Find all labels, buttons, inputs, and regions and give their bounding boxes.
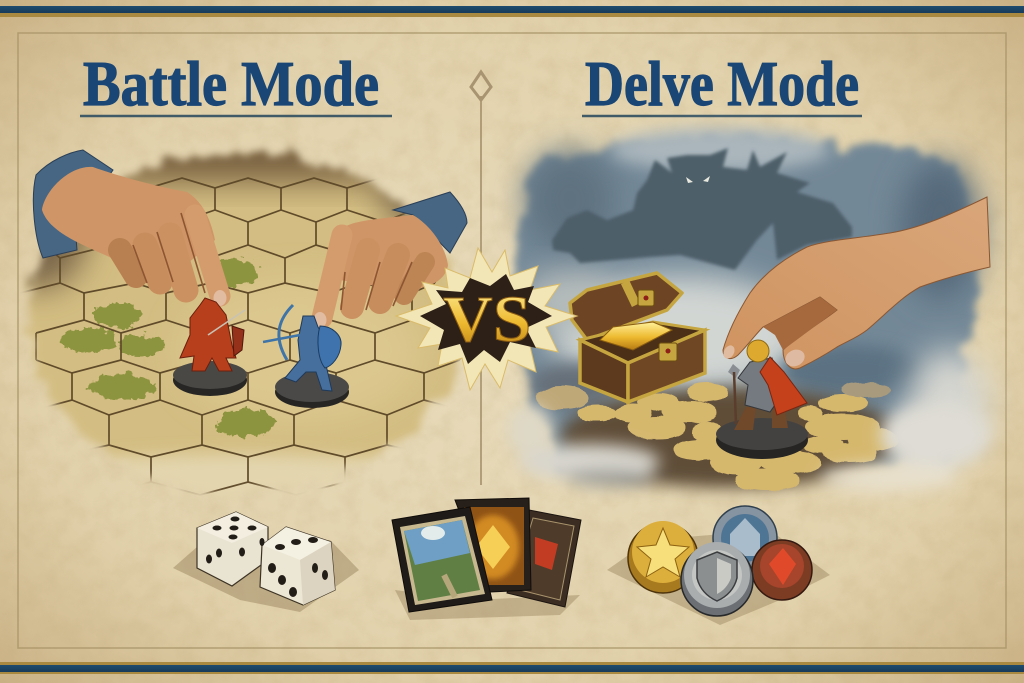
hex grid lines bbox=[16, 178, 480, 495]
treasure chest bbox=[570, 273, 705, 402]
icon: tokens bbox=[607, 506, 830, 625]
top ornamental band bbox=[0, 6, 1024, 17]
heading: Battle Mode: Battle Mode bbox=[83, 48, 379, 119]
cobblestone floor bbox=[538, 385, 900, 488]
blue knight miniature bbox=[263, 305, 349, 408]
panel: battle mode board bbox=[22, 144, 468, 496]
icon: cards bbox=[392, 498, 581, 620]
VS badge bbox=[396, 248, 577, 390]
icon: dice bbox=[173, 512, 359, 612]
panel: delve mode scene bbox=[508, 128, 990, 492]
storm clouds bbox=[515, 128, 990, 470]
monster silhouette bbox=[552, 148, 852, 270]
reaching hand bbox=[721, 197, 990, 369]
VS badge: VS bbox=[443, 283, 531, 356]
low clouds bbox=[508, 401, 990, 492]
right hand bbox=[314, 192, 467, 328]
hero miniature bbox=[716, 340, 808, 459]
heading: Delve Mode: Delve Mode bbox=[585, 48, 859, 119]
left hand bbox=[33, 150, 227, 306]
board terrain bbox=[22, 144, 462, 496]
center divider bbox=[471, 72, 491, 485]
red knight miniature bbox=[173, 298, 247, 396]
bottom ornamental band bbox=[0, 662, 1024, 674]
